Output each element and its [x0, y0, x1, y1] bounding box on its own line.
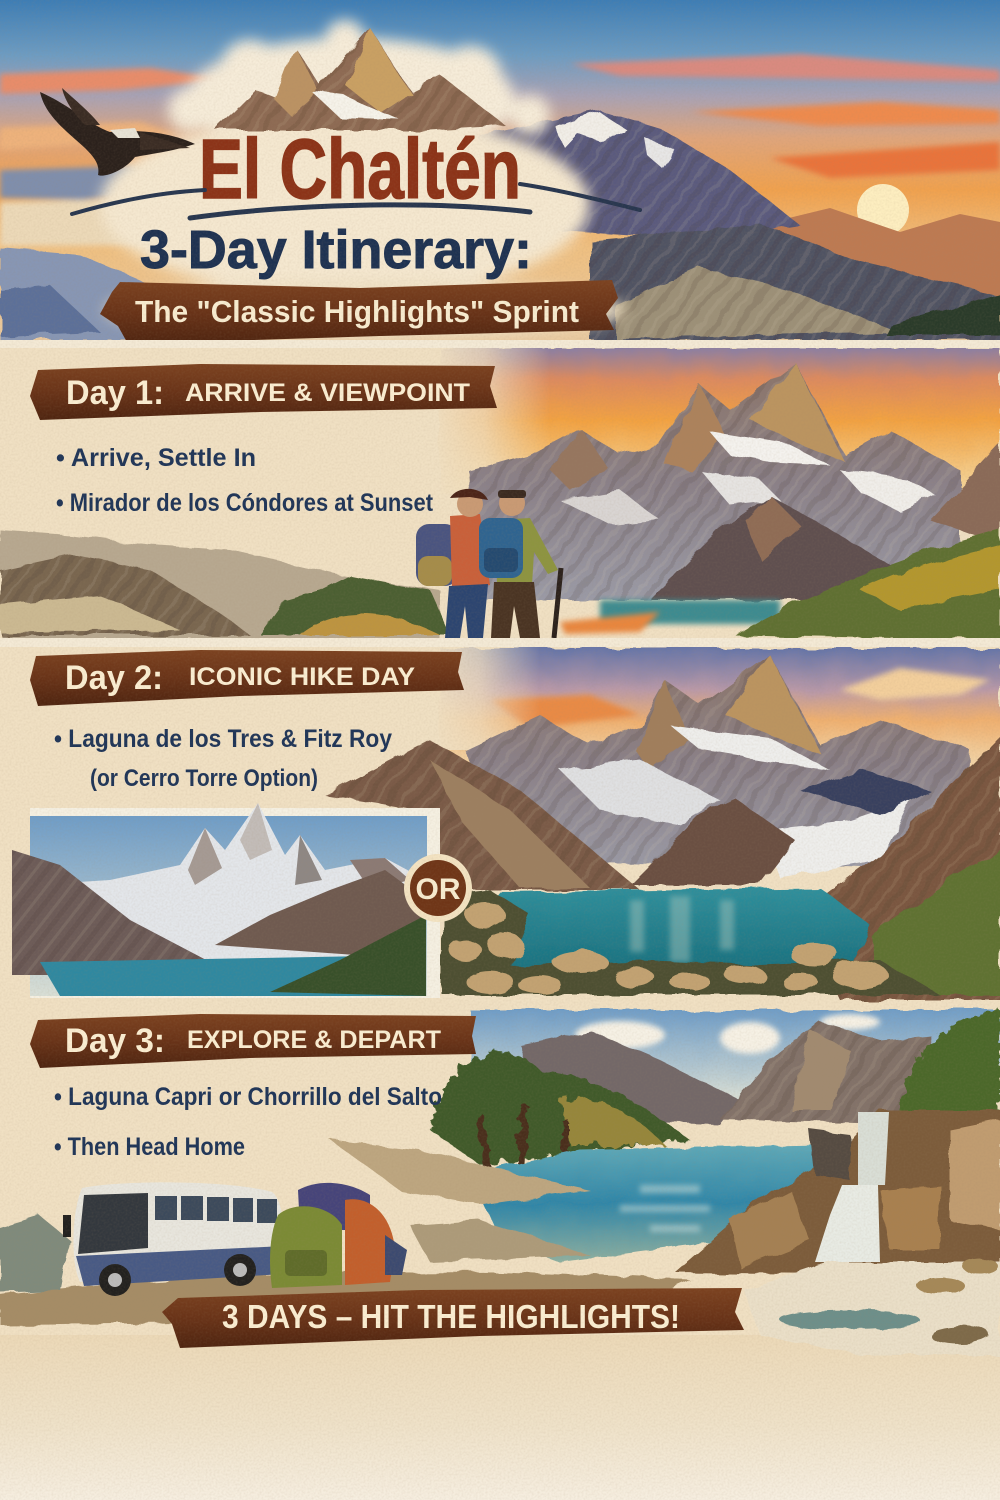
- lake: [470, 1145, 830, 1262]
- banner: closing: [162, 1288, 744, 1348]
- lake: [470, 888, 870, 972]
- sunset sky: [440, 348, 1000, 493]
- sky: [440, 648, 1000, 768]
- right cliffs: [675, 1110, 1000, 1275]
- panel: day 2: [0, 638, 1000, 1000]
- divider: [0, 340, 1000, 348]
- text: day 1 bullets: • Arrive, Settle In: [56, 444, 256, 472]
- banner: day 3: Day 3:: [65, 1022, 165, 1060]
- panel: day 1: [0, 340, 1000, 640]
- brown ridge: [325, 740, 640, 890]
- left distant hills: [0, 1216, 70, 1292]
- banner: day 1: Day 1:: [66, 374, 164, 412]
- lake reflections: [630, 896, 734, 962]
- panel: day 3: [0, 1010, 1000, 1355]
- hiker right: [495, 518, 558, 585]
- left shore rocks: [330, 1110, 1000, 1275]
- brush strokes: [72, 184, 640, 218]
- parchment fade: [430, 340, 550, 510]
- cloud behind peaks: [168, 20, 550, 162]
- left blue hills: [0, 248, 180, 340]
- text: day 1 bullets: [56, 444, 434, 517]
- right rock: [930, 445, 1000, 545]
- central peaks: [215, 28, 505, 130]
- sun: [857, 184, 909, 236]
- green hillside: [735, 530, 1000, 640]
- snowy right range: [0, 110, 1000, 340]
- lake shimmer: [620, 1185, 710, 1232]
- icon: bus: [63, 1182, 285, 1296]
- bottom parchment: [0, 1335, 1000, 1500]
- waterfall: [815, 1112, 889, 1262]
- mountains: [470, 362, 1000, 600]
- badge: or: [404, 854, 472, 922]
- text: day 3 bullets: • Then Head Home: [54, 1133, 245, 1161]
- backpack left: [416, 524, 458, 586]
- trees: [430, 1010, 1000, 1178]
- mountains: [520, 1022, 950, 1125]
- banner: day 2: ICONIC HIKE DAY: [189, 663, 415, 691]
- banner: day 3: EXPLORE & DEPART: [187, 1026, 441, 1054]
- hikers: [416, 489, 561, 638]
- stream rocks: [745, 1258, 1000, 1355]
- lake: [600, 600, 780, 624]
- left hills: [0, 530, 450, 640]
- sky: [470, 1010, 1000, 1100]
- text: day 2 bullets: (or Cerro Torre Option): [90, 765, 318, 792]
- banner: classic highlights: [100, 280, 618, 344]
- slate mountains: [590, 224, 1000, 340]
- title: El Chaltén: El Chaltén: [199, 122, 521, 216]
- banner: day 1: [30, 364, 497, 420]
- banner: day 2: [30, 650, 464, 706]
- shore rocks: [442, 890, 940, 995]
- icon: condor: [40, 88, 195, 176]
- clouds: [575, 1014, 880, 1054]
- sky: [0, 0, 1000, 345]
- trekking pole: [554, 568, 561, 638]
- banner: day 3: [30, 1014, 476, 1068]
- text: day 1 bullets: • Mirador de los Cóndores at Sunset: [56, 489, 434, 517]
- mountains: [325, 655, 1000, 1000]
- sunset clouds: [0, 54, 1000, 246]
- header scene: [0, 0, 1000, 345]
- distant orange range: [760, 208, 1000, 300]
- text: day 2 bullets: [54, 725, 392, 792]
- icon: backpacks: [270, 1183, 407, 1288]
- subtitle: 3-Day Itinerary:: [140, 220, 532, 280]
- text: day 3 bullets: [54, 1083, 442, 1161]
- banner: day 1: ARRIVE & VIEWPOINT: [185, 379, 470, 407]
- parchment fade: [430, 640, 540, 750]
- divider: [0, 638, 1000, 647]
- banner: day 2: Day 2:: [65, 659, 163, 697]
- banner: closing: 3 DAYS – HIT THE HIGHLIGHTS!: [222, 1298, 680, 1335]
- hiker left: [450, 514, 490, 588]
- road: [0, 1272, 690, 1325]
- text: day 3 bullets: • Laguna Capri or Chorrillo del Salto: [54, 1083, 442, 1111]
- right cliffs: [800, 735, 1000, 1000]
- text: day 2 bullets: • Laguna de los Tres & Fitz Roy: [54, 725, 392, 753]
- inset: cerro torre: [12, 803, 440, 998]
- backpack right: [479, 518, 523, 578]
- banner: classic highlights: The "Classic Highlights" Sprint: [135, 294, 579, 329]
- badge: or: OR: [416, 873, 461, 906]
